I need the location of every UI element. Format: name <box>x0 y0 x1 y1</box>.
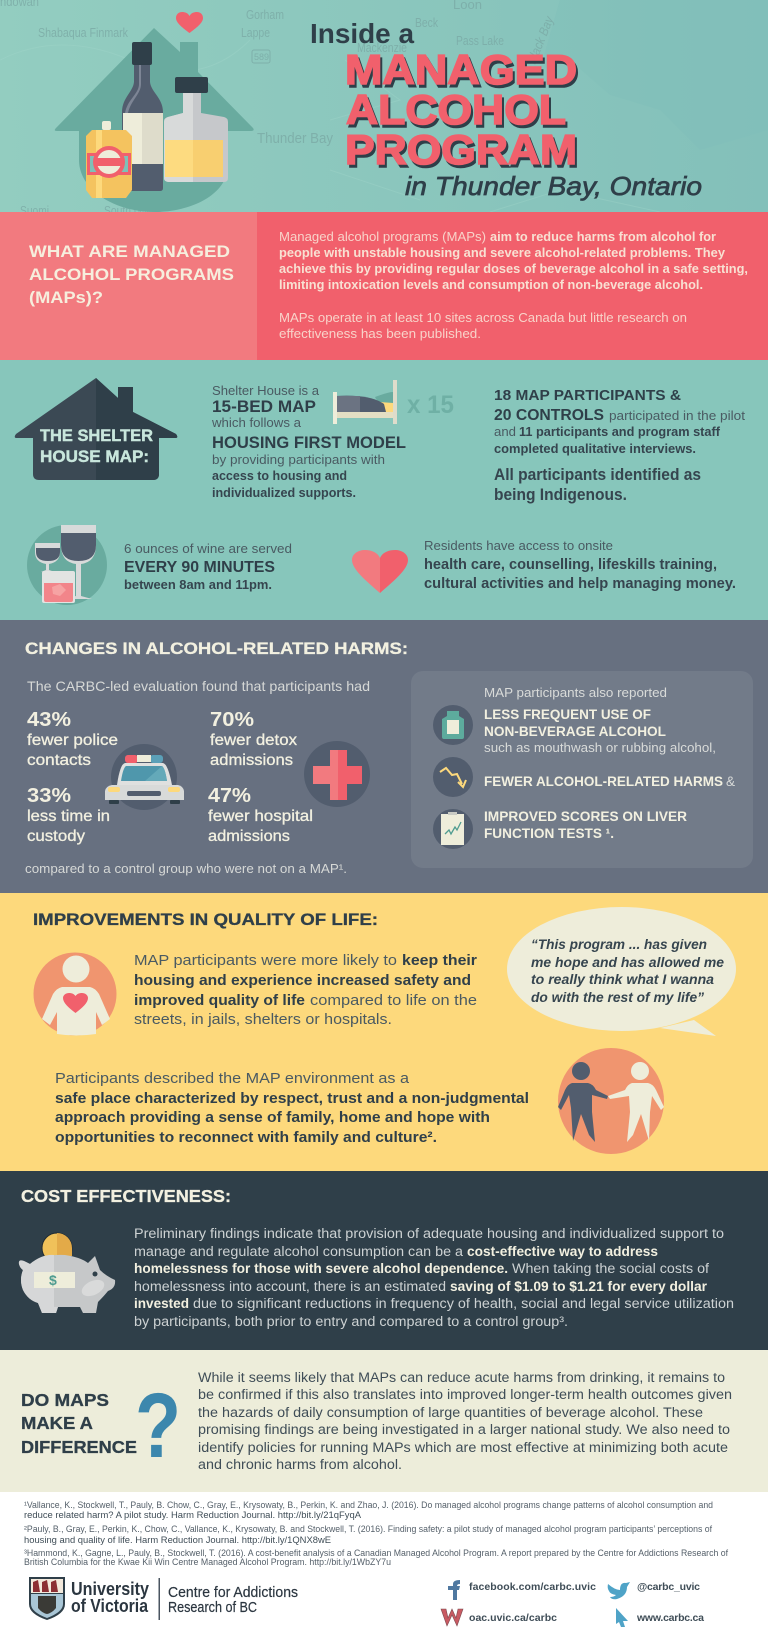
icon: mouthwash bottle <box>433 705 473 745</box>
text: twitter handle: @carbc_uvic <box>637 1581 700 1593</box>
icon: medical cross <box>304 741 370 807</box>
text: MAP definition: people with unstable housing and severe alcohol-related problems. They <box>279 245 726 260</box>
text: cost effectiveness body: Preliminary findings indicate that provision of adequate housing and individualized support to <box>134 1226 724 1241</box>
text: centre for addictions research <box>158 1578 298 1620</box>
text: safe place description: approach providing a sense of family, home and hope with <box>55 1109 490 1126</box>
text: MAP definition: aim to reduce harms from alcohol for <box>490 229 716 244</box>
text: cost effectiveness body: by participants, both prior to entry and compared to a control group³. <box>134 1314 568 1329</box>
panel: footer <box>0 1492 768 1639</box>
icon: piggy bank: $ <box>49 1272 57 1288</box>
icon: heart <box>352 550 408 593</box>
heading: what are MAPs <box>29 242 234 307</box>
heading: what are MAPs: WHAT ARE MANAGED <box>29 242 230 261</box>
title: Inside a <box>310 18 414 49</box>
icon: shelter house with label: HOUSE MAP: <box>40 448 149 466</box>
text: conclusion: promising findings are being investigated in a larger national study. We also need to <box>198 1422 730 1437</box>
text: conclusion: identify policies for running MAPs which are most effective at minimizing both acute <box>198 1440 728 1455</box>
text: shelter house description: which follows a <box>211 415 302 430</box>
panel: header map background: Gorham <box>246 7 284 22</box>
icon: person with heart <box>34 952 116 1036</box>
text: safe place description <box>55 1070 529 1146</box>
panel: map participants also reported <box>411 671 753 868</box>
text: university of victoria <box>71 1579 149 1616</box>
text: onsite access: Residents have access to onsite <box>424 538 613 553</box>
text: shelter house description: access to housing and <box>212 468 347 483</box>
text: shelter house description: Shelter House is a <box>212 383 320 398</box>
text: non-beverage alcohol: such as mouthwash or rubbing alcohol, <box>484 740 716 755</box>
text: participants: being Indigenous. <box>494 486 627 504</box>
heading: improvements in quality of life: IMPROVEMENTS IN QUALITY OF LIFE: <box>33 910 378 929</box>
panel: header map background: Suomi <box>20 203 49 218</box>
panel: header map background <box>0 0 768 218</box>
title: MANAGED <box>347 49 579 96</box>
stat: 43 percent fewer police contacts <box>27 709 118 769</box>
text: shelter house description: individualized supports. <box>212 485 356 500</box>
text: cost effectiveness body: manage and regulate alcohol consumption can be a <box>134 1244 464 1259</box>
text: MAP definition: limiting intoxication levels and consumption of non-beverage alcohol. <box>279 277 703 292</box>
title: ALCOHOL <box>348 89 568 136</box>
icon: two people shaking hands <box>558 1048 664 1154</box>
heading: do maps make a difference: MAKE A <box>21 1413 93 1433</box>
text: safe place description: Participants described the MAP environment as a <box>55 1070 410 1087</box>
text: participants: participated in the pilot <box>609 408 745 423</box>
icon: bed times 15 <box>333 380 454 424</box>
title <box>310 18 702 201</box>
text: wine schedule: between 8am and 11pm. <box>124 577 272 592</box>
heading: do maps make a difference: DIFFERENCE <box>21 1437 137 1457</box>
heading: do maps make a difference: DO MAPS <box>21 1390 109 1410</box>
text: non-beverage alcohol: LESS FREQUENT USE OF <box>484 707 651 722</box>
panel: the shelter house map <box>0 360 768 620</box>
text: evaluation intro: The CARBC-led evaluation found that participants had <box>27 678 370 694</box>
text: references <box>24 1500 728 1567</box>
text: references: housing and quality of life. Harm Reduction Journal. http://bit.ly/1QNX8wE <box>24 1535 331 1545</box>
text: wine schedule <box>124 541 292 592</box>
text: references: British Columbia for the Kwae Kii Win Centre Managed Alcohol Program. http://bit.ly/1WbZY7u <box>24 1557 391 1567</box>
callout: participant quote: me hope and has allowed me <box>531 954 724 970</box>
text: safe place description: safe place characterized by respect, trust and a non-judgmental <box>55 1090 529 1107</box>
title: PROGRAM <box>345 126 577 173</box>
text: references: ¹Vallance, K., Stockwell, T., Pauly, B. Chow, C., Gray, E., Krysowaty, B., Perkin, K. and Zhao, J. (2016). Do managed alcohol programs change patterns of alcohol consumption and <box>24 1500 713 1510</box>
text: housing and safety: streets, in jails, shelters or hospitals. <box>134 1011 392 1028</box>
text: shelter house description: HOUSING FIRST MODEL <box>212 433 406 452</box>
title: in Thunder Bay, Ontario <box>405 171 702 201</box>
text: cost effectiveness body <box>134 1226 734 1329</box>
text: housing and safety: housing and experience increased safety and <box>134 972 471 989</box>
icon: facebook <box>448 1580 460 1600</box>
icon: wine bottle <box>122 42 163 191</box>
panel: header map background: Lappe <box>241 25 270 40</box>
text: carbc website: www.carbc.ca <box>636 1612 704 1624</box>
text: cost effectiveness body: homelessness into account, there is an estimated <box>134 1279 446 1294</box>
text: housing and safety <box>134 952 477 1028</box>
icon: house with bottles and heart <box>55 12 254 212</box>
text: cost effectiveness body: due to significant reductions in frequency of health, social and legal service utilization <box>193 1296 734 1311</box>
panel: changes in alcohol-related harms <box>0 620 768 893</box>
stat: 47 percent fewer hospital admissions: fewer hospital <box>208 808 313 825</box>
text: MAP definition <box>279 229 748 341</box>
stat: 43 percent fewer police contacts: 43% <box>27 709 71 731</box>
icon: small heart <box>176 12 203 33</box>
text: conclusion: be confirmed if this also translates into improved longer-term health outcomes given <box>198 1387 732 1402</box>
heading: do maps make a difference <box>21 1390 137 1457</box>
text: centre for addictions research: Research of BC <box>168 1599 257 1616</box>
text: cost effectiveness body: invested <box>134 1296 189 1311</box>
icon: shelter house with label: THE SHELTER <box>40 427 153 445</box>
text: liver function tests: FUNCTION TESTS ¹. <box>484 826 614 841</box>
icon: bed times 15: x 15 <box>407 391 454 419</box>
stat: 70 percent fewer detox admissions: 70% <box>210 709 254 731</box>
panel: header map background: Beck <box>415 15 438 30</box>
panel: map participants also reported: MAP participants also reported <box>484 685 667 700</box>
icon: clipboard chart <box>433 809 473 849</box>
icon: downward trend arrow <box>433 757 473 797</box>
text: participants: 20 CONTROLS <box>494 407 604 424</box>
text: conclusion: and chronic harms from alcohol. <box>198 1457 402 1472</box>
text: MAP definition: Managed alcohol programs (MAPs) <box>279 229 486 244</box>
text: cost effectiveness body: cost-effective way to address <box>467 1244 658 1259</box>
icon: piggy bank <box>19 1233 115 1313</box>
text: university of victoria: University <box>71 1579 149 1599</box>
heading: changes in alcohol-related harms: CHANGES IN ALCOHOL-RELATED HARMS: <box>25 639 408 658</box>
text: facebook handle: facebook.com/carbc.uvic <box>469 1581 596 1593</box>
text: housing and safety: keep their <box>402 952 477 969</box>
text: shelter house description <box>211 383 406 500</box>
panel: header map background: South Gillies <box>104 203 162 218</box>
icon: question mark: ? <box>135 1375 181 1477</box>
stat: 33 percent less time in custody: custody <box>27 828 85 845</box>
icon: university of victoria shield <box>29 1577 65 1620</box>
text: cost effectiveness body: saving of $1.09 to $1.21 for every dollar <box>450 1279 708 1294</box>
panel: do maps make a difference <box>0 1350 768 1492</box>
text: MAP definition: effectiveness has been published. <box>279 326 481 341</box>
text: onsite access <box>424 538 736 592</box>
text: MAP definition: MAPs operate in at least 10 sites across Canada but little research on <box>279 310 687 325</box>
stat: 70 percent fewer detox admissions: admissions <box>210 752 293 769</box>
callout: participant quote: to really think what I wanna <box>531 971 714 987</box>
icon: liquor jar <box>164 77 228 182</box>
stat: 33 percent less time in custody: 33% <box>27 785 71 807</box>
panel: header map background: 589 <box>254 52 269 62</box>
text: participants: All participants identified as <box>494 466 701 484</box>
text: liver function tests <box>484 809 687 841</box>
icon: shelter house with label <box>15 378 177 480</box>
text: participants: 11 participants and program staff <box>519 424 721 439</box>
text: participants <box>494 388 745 504</box>
text: fewer harms: & <box>726 773 736 789</box>
text: housing and safety: improved quality of life <box>134 992 305 1009</box>
panel: header map background: Thunder Bay <box>257 130 333 147</box>
text: wine schedule: 6 ounces of wine are served <box>124 541 292 556</box>
heading: what are MAPs: (MAPs)? <box>29 288 103 307</box>
text: MAP definition: achieve this by providing regular doses of beverage alcohol in a safe setting, <box>279 261 748 276</box>
text: shelter house description: by providing participants with <box>212 452 385 467</box>
text: university of victoria: of Victoria <box>71 1596 149 1616</box>
text: safe place description: opportunities to reconnect with family and culture². <box>55 1129 437 1146</box>
text: participants: and <box>494 424 516 439</box>
callout: participant quote: “This program ... has given <box>531 936 707 952</box>
text: cost effectiveness body: When taking the social costs of <box>512 1261 709 1276</box>
stat: 43 percent fewer police contacts: contacts <box>27 752 91 769</box>
panel: cost effectiveness <box>0 1171 768 1350</box>
title: PROGRAM <box>347 129 579 176</box>
icon: police car <box>105 744 184 810</box>
stat: 47 percent fewer hospital admissions: admissions <box>208 828 290 845</box>
panel: header map background: Mackenzie <box>357 40 407 55</box>
text: conclusion <box>198 1370 732 1472</box>
icon: wine glasses <box>27 525 107 605</box>
stat: 70 percent fewer detox admissions: fewer detox <box>210 732 297 749</box>
text: liver function tests: IMPROVED SCORES ON LIVER <box>484 809 687 824</box>
text: wine schedule: EVERY 90 MINUTES <box>124 559 275 576</box>
callout: participant quote: do with the rest of my life” <box>531 989 704 1005</box>
text: onsite access: health care, counselling, lifeskills training, <box>424 556 717 573</box>
stat: 33 percent less time in custody: less time in <box>27 808 110 825</box>
text: participants: completed qualitative interviews. <box>494 441 696 456</box>
panel: header map background: Pass Lake <box>456 33 504 48</box>
text: references: ³Hammond, K., Gagne, L., Pauly, B., Stockwell, T. (2016). A cost-benefit analysis of a Canadian Managed Alcohol Program. A report prepared by the Centre for Addictions Research of <box>24 1548 728 1558</box>
text: non-beverage alcohol <box>484 707 716 755</box>
text: onsite access: cultural activities and help managing money. <box>424 575 736 592</box>
text: references: reduce related harm? A pilot study. Harm Reduction Journal. http://bit.ly/21qFyqA <box>24 1510 361 1520</box>
text: cost effectiveness body: homelessness for those with severe alcohol dependence. <box>134 1261 508 1276</box>
icon: twitter <box>608 1582 630 1599</box>
text: fewer harms: FEWER ALCOHOL-RELATED HARMS <box>484 774 723 789</box>
text: conclusion: While it seems likely that MAPs can reduce acute harms from drinking, it remains to <box>198 1370 725 1385</box>
text: oac website: oac.uvic.ca/carbc <box>469 1612 557 1624</box>
text: centre for addictions research: Centre for Addictions <box>168 1584 298 1601</box>
panel: improvements in quality of life <box>0 893 768 1171</box>
panel: header map background: Shabaqua Finmark <box>38 25 128 40</box>
title: MANAGED <box>345 46 577 93</box>
heading: cost effectiveness: COST EFFECTIVENESS: <box>21 1186 231 1206</box>
text: participants: 18 MAP PARTICIPANTS & <box>494 388 682 404</box>
text: control group note: compared to a control group who were not on a MAP¹. <box>25 861 347 876</box>
text: non-beverage alcohol: NON-BEVERAGE ALCOHOL <box>484 724 666 739</box>
text: shelter house description: 15-BED MAP <box>212 397 316 416</box>
callout: participant quote <box>507 907 736 1036</box>
heading: what are MAPs: ALCOHOL PROGRAMS <box>29 265 234 284</box>
stat: 47 percent fewer hospital admissions <box>208 785 313 845</box>
text: conclusion: the hazards of daily consumption of large quantities of beverage alcohol. These <box>198 1405 703 1420</box>
stat: 43 percent fewer police contacts: fewer police <box>27 732 118 749</box>
text: references: ²Pauly, B., Gray, E., Perkin, K., Chow, C., Vallance, K., Krysowaty, B. and Stockwell, T. (2016). Finding safety: a pilot study of managed alcohol program participants’ perceptions of <box>24 1524 712 1534</box>
stat: 33 percent less time in custody <box>27 785 110 845</box>
panel: what are managed alcohol programs <box>0 212 768 360</box>
title: ALCOHOL <box>346 86 566 133</box>
icon: cursor arrow <box>616 1608 628 1627</box>
icon: beer can <box>86 121 132 198</box>
text: housing and safety: MAP participants were more likely to <box>134 952 397 969</box>
icon: w logo <box>441 1609 463 1626</box>
panel: header map background: Black Bay <box>524 13 557 66</box>
stat: 47 percent fewer hospital admissions: 47% <box>208 785 251 807</box>
stat: 70 percent fewer detox admissions <box>210 709 297 769</box>
text: housing and safety: compared to life on the <box>310 992 477 1009</box>
